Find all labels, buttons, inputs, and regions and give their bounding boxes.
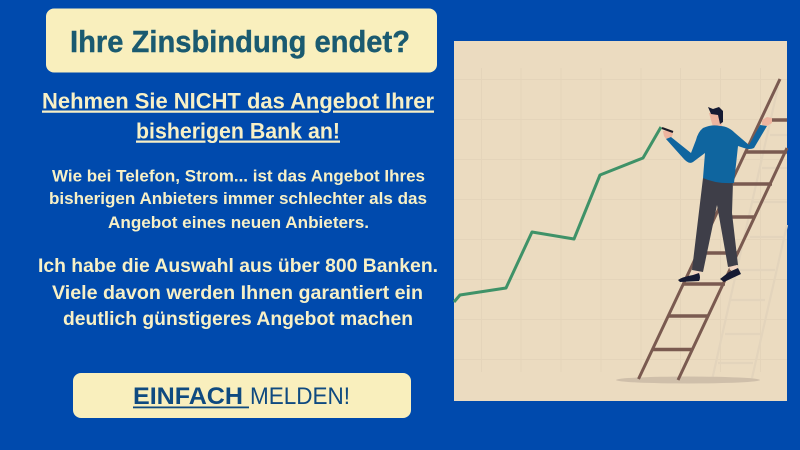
paragraph: choice of 800 banks <box>38 255 438 330</box>
paragraph: choice of 800 banks: Ich habe die Auswahl aus über 800 Banken. <box>38 255 438 277</box>
hair <box>708 107 723 124</box>
shoes <box>678 268 741 282</box>
paragraph: comparison with other providers: bisherigen Anbieters immer schlechter als das <box>49 190 427 208</box>
button text: MELDEN! <box>250 383 350 410</box>
button text: EINFACH <box>133 383 243 410</box>
faded ladder shadow <box>712 87 787 380</box>
paragraph: choice of 800 banks: Viele davon werden Ihnen garantiert ein <box>52 282 423 304</box>
paragraph: comparison with other providers: Angebot eines neuen Anbieters. <box>108 214 369 232</box>
sweater <box>666 125 767 183</box>
title text: Ihre Zinsbindung endet? <box>70 24 410 59</box>
chart grid <box>454 68 787 372</box>
button text <box>133 383 350 410</box>
ground shadow <box>616 376 760 384</box>
call-to-action button <box>73 373 411 418</box>
head and neck <box>709 113 722 127</box>
paragraph: comparison with other providers <box>49 168 427 232</box>
right hand <box>762 117 772 126</box>
left hand and marker <box>662 128 673 139</box>
paragraph: choice of 800 banks: deutlich günstigeres Angebot machen <box>63 308 413 330</box>
subheading <box>42 88 434 144</box>
subheading: bisherigen Bank an! <box>136 118 340 144</box>
person drawing the chart on the ladder <box>662 107 772 282</box>
rising green chart line <box>454 127 661 302</box>
paragraph: comparison with other providers: Wie bei Telefon, Strom... ist das Angebot Ihres <box>52 168 425 186</box>
ladder <box>638 79 787 380</box>
title box <box>46 8 437 72</box>
subheading: Nehmen Sie NICHT das Angebot Ihrer <box>42 88 434 114</box>
trousers <box>692 178 738 272</box>
illustration panel <box>454 41 787 401</box>
socks <box>693 265 738 275</box>
